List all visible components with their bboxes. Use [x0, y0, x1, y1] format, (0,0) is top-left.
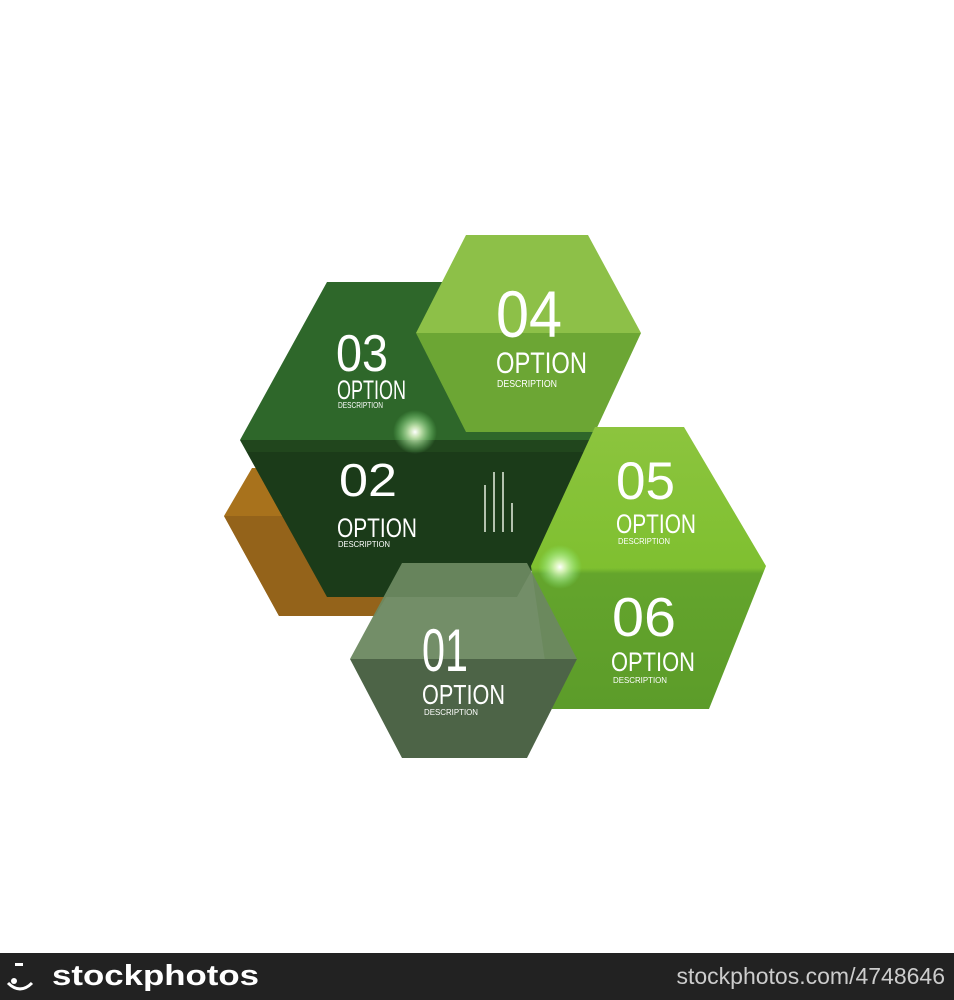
icon: sparkle top — [393, 410, 437, 454]
text: 03: 03 — [336, 325, 388, 383]
text: 05: DESCRIPTION — [618, 536, 670, 546]
panel: option 01 — [350, 563, 577, 758]
panel: option 05/06 — [531, 427, 766, 709]
text: 04: 04 — [496, 277, 562, 351]
text: 02 — [337, 454, 417, 549]
panel: option 02 — [240, 440, 604, 597]
text: 02: 02 — [339, 454, 397, 506]
text: 03: OPTION — [337, 375, 406, 405]
text: 06 — [611, 586, 695, 685]
footer bar — [0, 953, 954, 1000]
text: 05 — [616, 452, 696, 546]
logo text: stockphotos — [52, 960, 259, 992]
text: 06: DESCRIPTION — [613, 675, 667, 685]
text: 05: OPTION — [616, 509, 696, 539]
text: 03 — [336, 325, 406, 410]
text: 01: 01 — [422, 617, 468, 684]
text: 03: DESCRIPTION — [338, 400, 383, 410]
text: 05: 05 — [616, 452, 675, 511]
icon: vertical lines — [485, 472, 512, 532]
icon: sparkle bottom — [538, 545, 582, 589]
panel: orange hexagon — [224, 468, 420, 616]
text: 01 — [422, 617, 505, 717]
panel: option 03 — [240, 282, 604, 440]
text: 04 — [496, 277, 587, 390]
footer url: stockphotos.com/4748646 — [676, 963, 945, 989]
text: 02: DESCRIPTION — [338, 539, 390, 549]
text: 06: OPTION — [611, 647, 695, 677]
text: 01: DESCRIPTION — [424, 707, 478, 717]
text: 04: OPTION — [496, 347, 587, 380]
text: 02: OPTION — [337, 513, 417, 543]
panel: option 04 — [416, 235, 641, 432]
text: 01: OPTION — [422, 679, 505, 710]
icon: logo — [8, 963, 32, 989]
text: 04: DESCRIPTION — [497, 379, 557, 390]
text: 06: 06 — [612, 586, 676, 648]
